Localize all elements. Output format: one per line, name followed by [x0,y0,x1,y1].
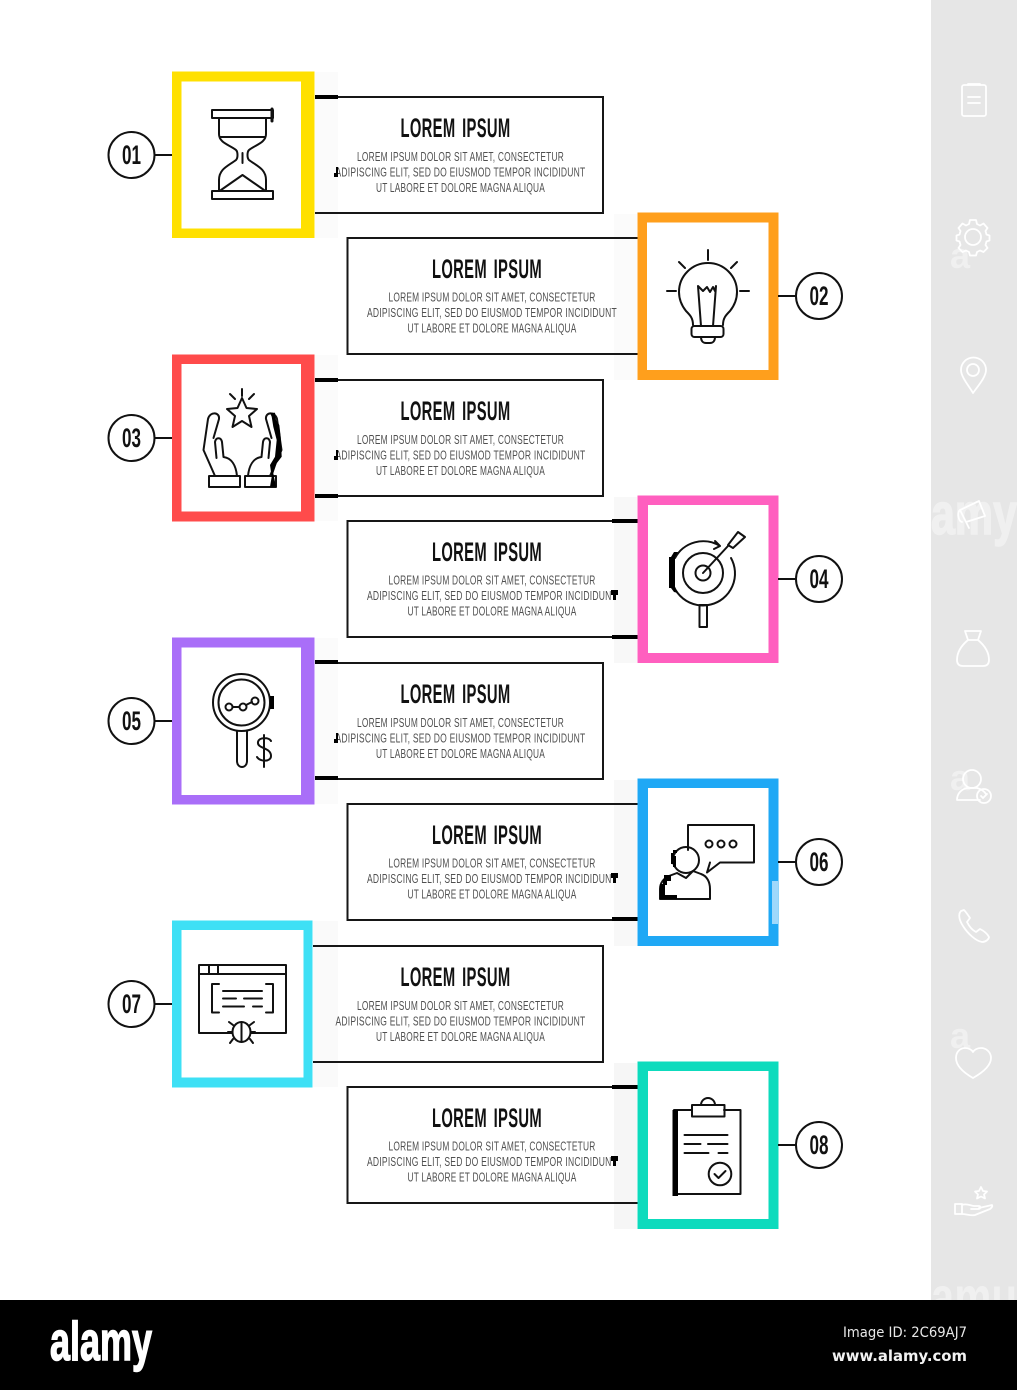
sidebar icon: gear [956,220,990,256]
text box [315,662,603,779]
body text [334,432,586,478]
body text: ADIPISCING ELIT, SED DO EIUSMOD TEMPOR INCIDIDUNT [367,588,617,603]
number badge: 01 [122,140,141,170]
sidebar icon: map pin [961,357,986,393]
website: www.alamy.com [832,1347,967,1365]
body text [334,149,586,195]
icon: person with speech bubble [660,825,754,899]
card shadow [315,638,338,804]
card shadow [614,214,637,380]
number badge [108,981,172,1027]
number badge: 02 [810,281,828,311]
icon: hands holding star [204,389,282,487]
body text [367,572,618,618]
heading: LOREM IPSUM [400,396,510,426]
icon: clipboard with check [672,1098,740,1196]
body text: ADIPISCING ELIT, SED DO EIUSMOD TEMPOR INCIDIDUNT [336,164,586,180]
number badge: 06 [810,847,828,877]
icon frame [638,212,778,380]
body text: LOREM IPSUM DOLOR SIT AMET, CONSECTETUR [357,715,564,730]
footer logo: alamy [50,1310,152,1372]
sidebar icon: user check [957,770,991,803]
body text: UT LABORE ET DOLORE MAGNA ALIQUA [408,320,576,336]
icon: hourglass [212,109,273,199]
body text: UT LABORE ET DOLORE MAGNA ALIQUA [376,463,545,478]
number badge [778,556,842,602]
body text: ADIPISCING ELIT, SED DO EIUSMOD TEMPOR INCIDIDUNT [336,1014,586,1028]
number badge [108,132,172,178]
body text: ADIPISCING ELIT, SED DO EIUSMOD TEMPOR INCIDIDUNT [336,448,586,462]
heading: LOREM IPSUM [432,537,542,567]
text box [348,1087,638,1203]
body text: LOREM IPSUM DOLOR SIT AMET, CONSECTETUR [388,1138,596,1154]
body text: ADIPISCING ELIT, SED DO EIUSMOD TEMPOR INCIDIDUNT [367,1154,617,1169]
heading: LOREM IPSUM [432,820,542,850]
panel: step 05 [108,638,603,804]
panel: step 01 [108,72,603,238]
sidebar icon: clipboard [962,84,986,116]
card shadow [315,355,338,521]
number badge: 04 [810,564,828,594]
body text [367,290,617,336]
sidebar icon: phone [959,910,989,942]
text box [315,380,603,496]
sidebar panel [931,0,1017,1328]
number badge: 07 [122,989,141,1019]
body text: UT LABORE ET DOLORE MAGNA ALIQUA [376,746,545,761]
number badge: 08 [810,1130,828,1160]
panel: step 04 [348,496,842,663]
panel: step 02 [348,212,842,380]
icon frame [172,920,312,1088]
text box [348,521,638,637]
text box [348,804,638,920]
body text [334,715,586,761]
heading: LOREM IPSUM [400,113,510,143]
panel: step 07 [108,920,603,1088]
card shadow [614,497,637,663]
image id: Image ID: 2C69AJ7 [843,1325,967,1341]
body text: LOREM IPSUM DOLOR SIT AMET, CONSECTETUR [357,432,564,447]
panel: step 03 [108,354,603,522]
text box [348,238,638,354]
card shadow [315,72,338,238]
footer bar [0,1300,1017,1390]
body text: UT LABORE ET DOLORE MAGNA ALIQUA [408,1170,576,1184]
icon frame [172,638,314,804]
icon frame [638,496,778,663]
icon frame [172,72,314,238]
body text: ADIPISCING ELIT, SED DO EIUSMOD TEMPOR INCIDIDUNT [336,730,586,746]
body text: LOREM IPSUM DOLOR SIT AMET, CONSECTETUR [388,290,596,304]
sidebar icon: hand with star [955,1187,992,1215]
body text: LOREM IPSUM DOLOR SIT AMET, CONSECTETUR [388,856,596,870]
number badge: 03 [122,423,141,453]
heading: LOREM IPSUM [432,1103,542,1133]
panel: step 06 [348,778,842,946]
number badge [778,1122,842,1168]
sidebar icon: megaphone [958,501,985,528]
icon frame [638,1062,778,1229]
panel: step 08 [348,1062,842,1229]
body text [336,998,586,1044]
sidebar panel: a [950,235,971,276]
body text: UT LABORE ET DOLORE MAGNA ALIQUA [408,604,576,618]
body text: LOREM IPSUM DOLOR SIT AMET, CONSECTETUR [388,572,596,588]
heading: LOREM IPSUM [400,679,510,709]
body text: ADIPISCING ELIT, SED DO EIUSMOD TEMPOR INCIDIDUNT [367,871,617,886]
card shadow [614,780,637,946]
icon: magnifier with chart and dollar [213,674,274,767]
number badge [778,273,842,319]
card shadow [614,1063,637,1229]
body text [367,1138,618,1184]
sidebar icon: heart [956,1048,991,1078]
number badge [778,839,842,885]
text box [315,97,603,213]
icon frame [638,778,778,946]
heading: LOREM IPSUM [400,962,510,992]
sidebar icon: money bag [957,631,989,666]
number badge: 05 [122,706,141,736]
text box [313,946,603,1062]
body text: UT LABORE ET DOLORE MAGNA ALIQUA [376,1029,545,1044]
number badge [108,698,172,744]
number badge [108,415,172,461]
body text [367,856,618,902]
body text: UT LABORE ET DOLORE MAGNA ALIQUA [408,886,576,902]
card shadow [313,921,338,1087]
icon: light bulb [667,250,749,343]
icon frame [172,354,314,522]
body text: UT LABORE ET DOLORE MAGNA ALIQUA [376,180,545,195]
sidebar panel: a [950,757,971,798]
body text: ADIPISCING ELIT, SED DO EIUSMOD TEMPOR INCIDIDUNT [367,305,617,320]
sidebar panel: a [950,1015,971,1056]
icon: browser with bug [199,965,286,1043]
heading: LOREM IPSUM [432,254,542,284]
icon: target with arrow [669,532,745,627]
body text: LOREM IPSUM DOLOR SIT AMET, CONSECTETUR [357,998,564,1013]
body text: LOREM IPSUM DOLOR SIT AMET, CONSECTETUR [357,149,564,164]
